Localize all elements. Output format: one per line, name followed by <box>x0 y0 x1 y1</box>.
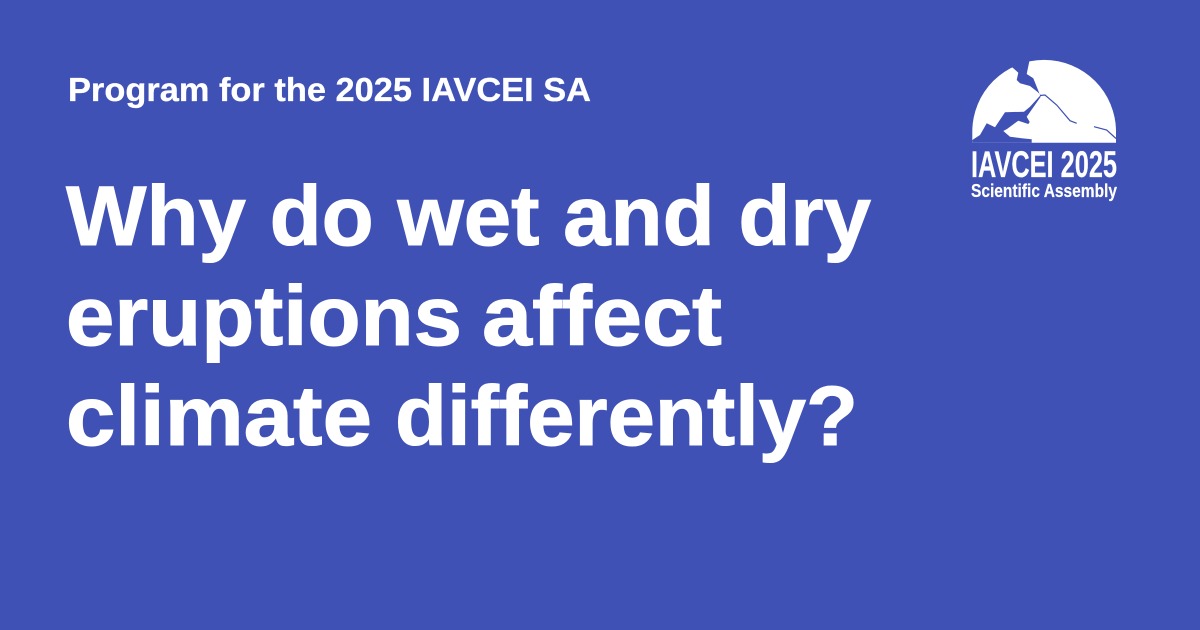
subtitle: Program for the 2025 IAVCEI SA <box>68 71 591 108</box>
title: climate <box>66 369 372 463</box>
title: eruptions <box>66 269 462 363</box>
title: differently? <box>395 369 858 463</box>
logo tagline: Scientific Assembly <box>971 180 1118 201</box>
title <box>66 169 871 463</box>
title: Why do wet and dry <box>66 169 871 263</box>
title: affect <box>482 269 722 363</box>
logo wordmark: IAVCEI 2025 <box>971 144 1117 185</box>
logo: IAVCEI 2025 Scientific Assembly <box>971 58 1118 201</box>
icon: volcano semicircle <box>972 58 1116 143</box>
